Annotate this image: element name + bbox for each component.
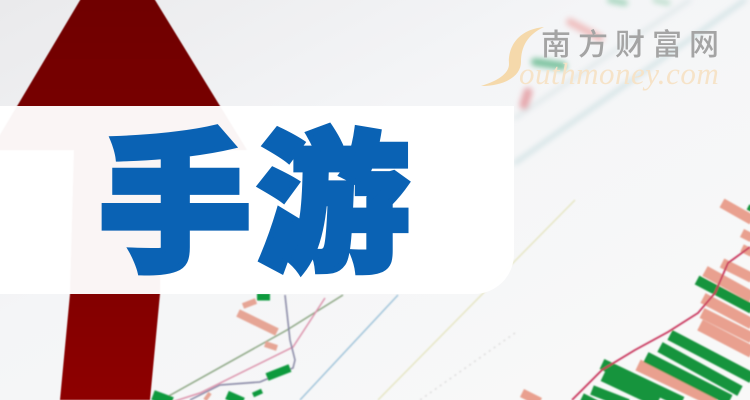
salmon candles [522, 203, 750, 400]
blurred chart: upper right [515, 0, 745, 163]
candlestick chart: lower right [522, 203, 750, 400]
salmon candles [205, 301, 277, 400]
candlestick chart: lower left [153, 200, 575, 400]
white panel [0, 106, 514, 294]
watermark logo [481, 20, 726, 91]
title: 手游 [99, 121, 415, 291]
red price line [572, 247, 750, 400]
logo chinese name: 南方财富网 [541, 20, 726, 64]
moving average lines [167, 200, 575, 400]
red arrow [0, 0, 247, 400]
logo domain: outhmoney.com [519, 56, 719, 91]
logo swoosh [481, 27, 544, 86]
green candles [153, 297, 290, 400]
green candles [582, 207, 750, 400]
